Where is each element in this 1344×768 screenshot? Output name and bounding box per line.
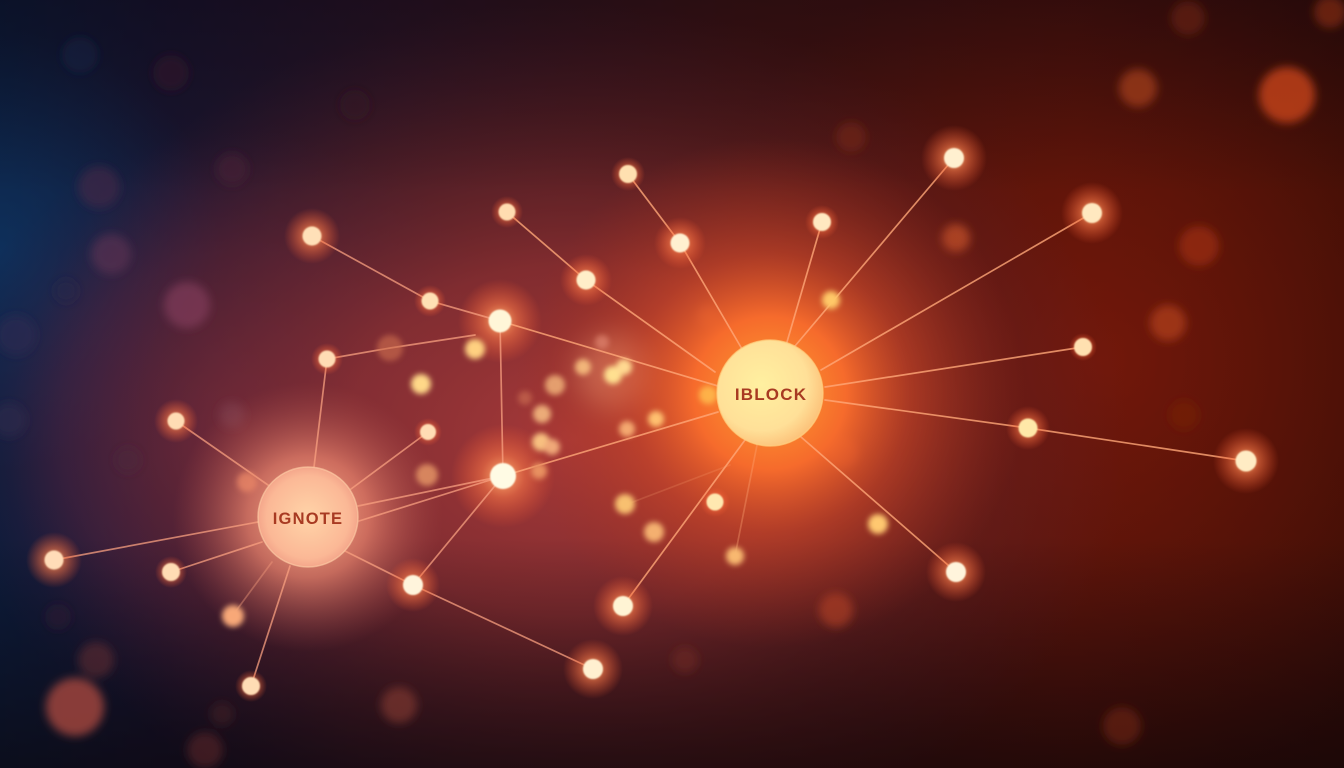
label: IGNOTE: IGNOTE <box>273 510 343 528</box>
network nodes: bright <box>26 125 1279 699</box>
network nodes: small <box>155 157 1097 702</box>
connection lines: IBLOCK <box>500 158 1246 606</box>
label: IBLOCK: IBLOCK <box>735 385 807 404</box>
connection lines: IGNOTE <box>54 236 593 686</box>
hub: IGNOTE <box>258 467 358 567</box>
soft small nodes <box>222 291 888 627</box>
hub glow: IGNOTE <box>173 382 443 652</box>
hub: IBLOCK <box>717 340 823 446</box>
hub glow: IBLOCK <box>515 138 1025 648</box>
central glow cluster <box>451 279 651 528</box>
